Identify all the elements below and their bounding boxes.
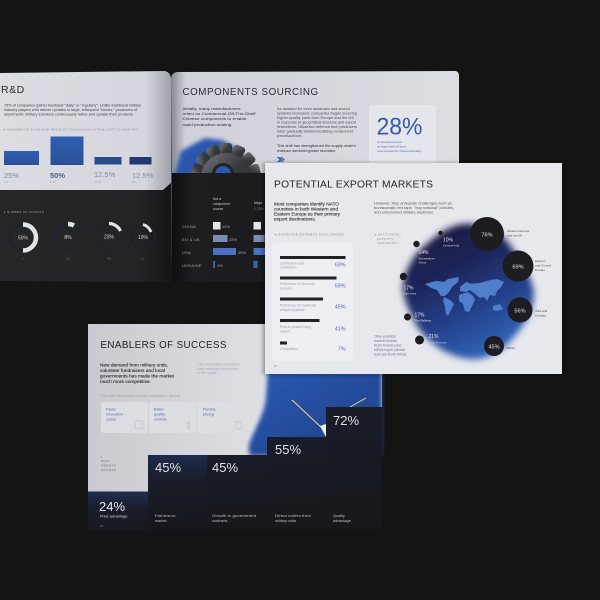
panel: dark table: source xyxy=(213,207,223,211)
text block: intro: Initially, many manufacturers xyxy=(182,106,241,111)
step: quality advantage 72%: 72% xyxy=(333,413,359,428)
bar chart: flagship revisions: 6-20 xyxy=(50,180,56,184)
small dots with region labels: 14% xyxy=(418,250,429,256)
callout: 28 percent: components domestically. xyxy=(377,149,422,153)
text block: NATO destinations: Eastern Europe as their primary xyxy=(274,212,341,216)
bubble: western europe 76%: and the UK xyxy=(507,234,523,238)
text block: R&D intro: 75% of companies gather feedback "daily" or "regularly". Unlike traditional military xyxy=(4,104,141,108)
label: anticipated exports geography: ▸ ANTICIPATED xyxy=(375,232,401,236)
small dots with region labels: Subsaharan xyxy=(418,256,435,260)
text block: NATO destinations: export destinations. xyxy=(274,216,316,222)
small dots with region labels: 10% xyxy=(443,238,454,244)
icon: gear xyxy=(191,143,261,203)
card: flexible pricing xyxy=(198,402,245,433)
card: challenges bar chart: Risk of product being xyxy=(280,325,311,329)
small dots with region labels: Africa xyxy=(418,260,426,264)
step chart: growth drivers xyxy=(88,407,382,530)
text block: other potential markets: Other potential xyxy=(374,334,396,338)
step: quality advantage 72%: advantage xyxy=(333,519,351,523)
text block: supply detail: resilience and fueled greater innovation. xyxy=(277,149,336,153)
text block: agile producers xyxy=(198,362,240,375)
text block: other potential markets: markets include xyxy=(374,339,397,343)
text block: agile producers: have emerged as leaders xyxy=(198,367,239,371)
panel: R&D booklet page xyxy=(0,71,172,282)
bubble: USA and Canada 56%: USA and xyxy=(535,309,547,313)
bar chart: flagship revisions: 25% xyxy=(4,171,19,180)
card: faster innovation cycles: cycles xyxy=(106,418,116,422)
card: challenges bar chart: 45% xyxy=(335,304,346,310)
small dots with region labels: 17% xyxy=(414,312,425,318)
label: number of patents: ▸ NUMBER OF PATENTS xyxy=(4,210,44,214)
text block: supply detail: systems increased, companies began sourcing xyxy=(277,112,357,116)
label: main growth drivers: MAIN xyxy=(101,459,110,463)
panel: dark table: UKRAINE xyxy=(182,263,202,268)
bubble: western europe 76%: 76% xyxy=(481,232,493,238)
text block: NATO destinations: Most companies identify NATO xyxy=(274,202,339,206)
text block: demand: New demand from military units, xyxy=(100,362,168,368)
heading: R&D: R&D xyxy=(1,84,25,96)
step: fast time-to-market 45% xyxy=(148,455,208,530)
text block: supply detail: higher-quality parts from Europe and the US xyxy=(277,116,355,120)
small dots with region labels: The Balkans xyxy=(414,318,432,322)
step: price advantage 24%: 24% xyxy=(99,499,125,514)
step: quality advantage 72%: Quality xyxy=(333,514,345,518)
card: challenges bar chart: copied xyxy=(280,330,290,334)
icon: double chevron xyxy=(276,157,285,162)
text block: demand xyxy=(100,362,175,384)
heading: enablers of success: ENABLERS OF SUCCESS xyxy=(100,340,227,351)
text: page number: 24 xyxy=(274,364,278,368)
label: main growth drivers: GROWTH xyxy=(101,464,116,468)
step: direct orders 55%: 55% xyxy=(275,442,301,457)
heading: components sourcing: COMPONENTS SOURCING xyxy=(182,87,319,98)
text block: R&D intro xyxy=(4,104,141,116)
label: main growth drivers xyxy=(101,454,116,472)
step: growth in government contracts 45%: contracts xyxy=(212,519,228,523)
card: challenges bar chart: Competition xyxy=(280,347,298,351)
text block: agile producers: The most agile producers xyxy=(198,362,240,366)
card: challenges bar chart: 59% xyxy=(335,284,346,290)
text block: demand: much more competitive. xyxy=(100,379,151,384)
text block: demand: governments has made the market xyxy=(100,374,175,378)
world map xyxy=(425,277,504,316)
text block: intro: Chinese components to enable xyxy=(182,116,246,121)
decoration: blue blob xyxy=(174,138,246,176)
bubble: eastern europe 69%: Europe xyxy=(535,268,545,272)
text block: supply detail: in response to geopolitical tensions and export xyxy=(277,120,356,124)
text block: supply detail xyxy=(277,107,357,153)
bubble: eastern europe 69%: Eastern xyxy=(535,259,546,263)
small dots with region labels xyxy=(400,231,460,344)
text block: other potential markets: MENA region (Middle xyxy=(374,348,405,352)
small dots with region labels: Latin America xyxy=(428,340,447,344)
card: faster innovation cycles xyxy=(101,402,148,433)
text block: agile producers: in the sector. xyxy=(198,371,218,375)
panel: dark table: 45% xyxy=(238,250,246,255)
panel: dark table: component xyxy=(213,202,230,206)
bubble: eastern europe 69%: and Central xyxy=(535,264,551,268)
step: growth in government contracts 45%: 45% xyxy=(212,460,238,475)
text block: intro xyxy=(182,106,257,127)
step: price advantage 24%: 16 xyxy=(100,524,104,528)
text block: supply detail: production. xyxy=(277,134,303,138)
card: challenges bar chart: weapon systems xyxy=(280,308,305,312)
bubble: eastern europe 69%: 69% xyxy=(512,264,524,270)
step: price advantage 24%: Price advantage xyxy=(100,514,127,518)
text block: demand: volunteer fundraisers and local xyxy=(100,368,165,373)
bubble: eastern europe 69% xyxy=(502,250,551,282)
bubble: USA and Canada 56%: Canada xyxy=(535,314,546,318)
text block: supply detail: As demand for more advanced and secure xyxy=(277,107,350,111)
panel: dark table: 28% xyxy=(229,237,237,242)
bubble: western europe 76% xyxy=(470,217,530,251)
text block: challenges: bureaucratic red tape, "buy national" policies, xyxy=(374,206,454,210)
text block: other potential markets xyxy=(374,334,407,356)
step: fast time-to-market 45%: market xyxy=(155,519,168,523)
callout: 28 percent: of companies source xyxy=(377,140,402,144)
bar chart: flagship revisions: 12.5% xyxy=(132,171,154,180)
panel: dark table xyxy=(172,173,272,282)
decoration: blue-navy blob xyxy=(403,224,534,359)
donut charts: patents: 0 xyxy=(22,256,24,260)
step: direct orders 55% xyxy=(267,437,326,530)
panel: enablers of success page xyxy=(88,324,382,530)
label: expected exports challenges: ▸ EXPECTED EXPORTS CHALLENGES xyxy=(275,232,344,236)
panel: dark table: CHINA xyxy=(182,224,196,229)
card: better quality controls: quality xyxy=(154,412,165,416)
bar chart: flagship revisions: 21-50 xyxy=(94,180,102,184)
label: anticipated exports geography: GEOGRAPHY xyxy=(377,241,399,245)
card: better quality controls: controls xyxy=(154,418,167,422)
card: better quality controls: Better xyxy=(154,408,165,412)
text block: challenges: and entrenched military doctrines. xyxy=(374,210,434,214)
panel: dark table: Not a xyxy=(213,197,221,201)
step: fast time-to-market 45%: 45% xyxy=(155,460,181,475)
donut charts: patents: 23% xyxy=(104,234,115,240)
bubble: USA and Canada 56% xyxy=(508,298,547,322)
label: anticipated exports geography xyxy=(375,232,401,245)
text block: R&D intro: industry players who deliver updates in large, infrequent "blocks," producers of xyxy=(4,108,137,112)
panel: dark table: 14% xyxy=(222,224,230,229)
callout: 28 percent xyxy=(369,105,436,175)
callout: 28 percent: at least half of their xyxy=(377,144,406,148)
card: challenges bar chart: Preference for domestic xyxy=(280,282,315,286)
step: fast time-to-market 45%: Fast time-to- xyxy=(155,514,177,518)
card: better quality controls xyxy=(149,402,196,433)
bubble: MENA 45% xyxy=(484,336,516,356)
card: faster innovation cycles: innovation xyxy=(106,412,123,416)
card: challenges bar chart: producer xyxy=(280,286,294,290)
text block: supply detail: have gradually started localizing component xyxy=(277,130,353,134)
card: challenges bar chart: Preference for traditional xyxy=(280,304,316,308)
bar chart: flagship revisions: 50+ xyxy=(132,180,137,184)
panel: potential export markets page xyxy=(263,163,563,375)
step: direct orders 55%: military units xyxy=(275,519,296,523)
small dots with region labels: East Asia xyxy=(404,292,416,296)
donut charts: patents: 8% xyxy=(64,235,72,241)
text block: challenges xyxy=(374,202,454,214)
card: challenges bar chart xyxy=(272,243,353,361)
label: anticipated exports geography: EXPORTS xyxy=(377,237,393,241)
text: competition lead-in: This shift has created intense competition, driving: xyxy=(100,394,181,398)
step: direct orders 55%: Direct orders from xyxy=(275,514,311,518)
bar chart: flagship revisions: 1-5 xyxy=(4,180,8,184)
step: price advantage 24% xyxy=(88,492,148,530)
bar chart: flagship revisions: 12.5% xyxy=(94,170,116,179)
panel: dark table: USA xyxy=(182,250,191,255)
card: challenges bar chart: codification xyxy=(280,266,297,270)
card: flexible pricing: Flexible xyxy=(203,408,216,412)
card: challenges bar chart: Certification and xyxy=(280,262,304,266)
bubble: western europe 76%: Western Europe xyxy=(507,229,530,233)
donut charts: patents xyxy=(10,224,155,260)
text block: R&D intro: asymmetric military solutions continuously refine and update their products xyxy=(4,112,133,116)
bubble: MENA 45%: 45% xyxy=(488,344,500,350)
text block: other potential markets: East and North Africa). xyxy=(374,352,407,356)
bubble: MENA 45%: MENA xyxy=(506,346,516,350)
card: challenges bar chart: 69% xyxy=(335,262,346,268)
text block: challenges: However, they anticipate challenges such as xyxy=(374,202,452,206)
label: flagship revisions: ▸ NUMBER OF FLAGSHIP PRODUCT REVISIONS IN THE LAST 12 MONTHS xyxy=(4,128,138,132)
callout: 28 percent: 28% xyxy=(376,114,422,140)
step: growth in government contracts 45% xyxy=(207,455,267,530)
label: main growth drivers: › xyxy=(101,454,102,458)
decoration: blue glow with yellow rays xyxy=(249,370,382,456)
donut charts: patents: 19% xyxy=(138,235,149,241)
donut charts: patents: 1-2 xyxy=(66,256,70,260)
bar chart: flagship revisions xyxy=(4,136,154,184)
label: main growth drivers: DRIVERS xyxy=(101,468,116,472)
small dots with region labels: 17% xyxy=(404,286,414,292)
step: quality advantage 72% xyxy=(326,407,382,530)
text block: supply detail: This shift has strengthened the supply chain's xyxy=(277,144,356,148)
text block: intro: rapid production scaling. xyxy=(182,122,232,127)
heading: potential export markets: POTENTIAL EXPORT MARKETS xyxy=(274,180,433,190)
small dots with region labels: 21% xyxy=(428,334,439,340)
donut charts: patents: 6+ xyxy=(141,256,145,260)
text block: other potential markets: North America and xyxy=(374,344,401,348)
panel: dark table: EU & UK xyxy=(182,237,200,242)
panel: components sourcing page xyxy=(171,71,459,282)
card: challenges bar chart: 41% xyxy=(335,326,346,332)
small dots with region labels: Central Asia xyxy=(443,244,460,248)
bubble: USA and Canada 56%: 56% xyxy=(514,308,526,314)
card: challenges bar chart: 7% xyxy=(338,346,346,352)
card: faster innovation cycles: Faster xyxy=(106,408,117,412)
donut charts: patents: 50% xyxy=(18,236,29,242)
text block: intro: relied on Commercial-Off-The-Shelf xyxy=(182,111,257,116)
card: flexible pricing: pricing xyxy=(203,412,214,416)
panel: dark table: 3% xyxy=(217,263,223,268)
text block: NATO destinations: countries in both Western and xyxy=(274,206,339,212)
donut charts: patents: 3-5 xyxy=(107,256,111,260)
bar chart: flagship revisions: 50% xyxy=(50,171,65,180)
panel: dark table: 0-25% xyxy=(254,207,264,211)
panel: dark table: Major xyxy=(254,201,263,205)
text block: NATO destinations xyxy=(274,202,341,222)
step: growth in government contracts 45%: Growth in government xyxy=(212,514,257,518)
text block: supply detail: restrictions. Ukrainian defence tech producers xyxy=(277,125,357,129)
